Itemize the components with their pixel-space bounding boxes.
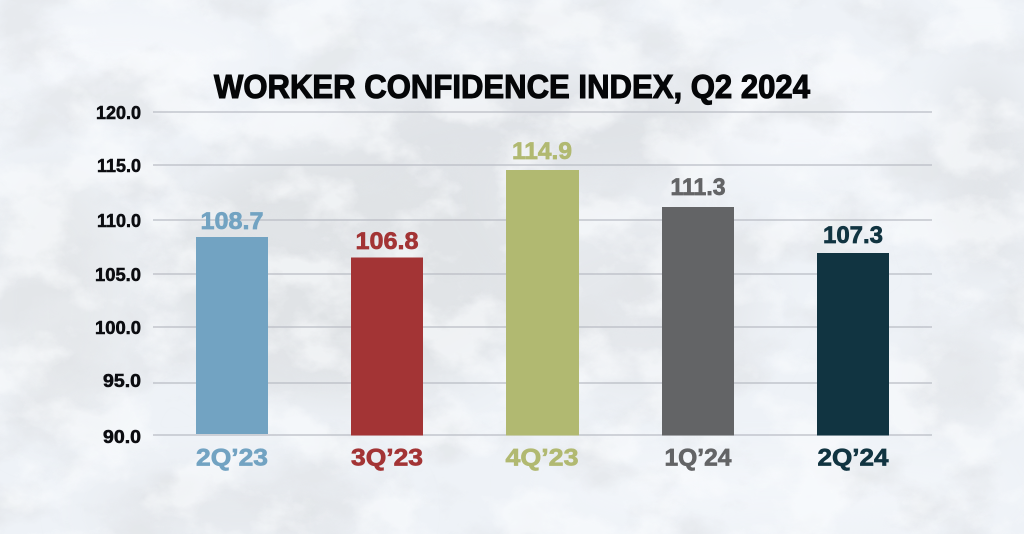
category: 2Q'24: 2Q’24 (818, 444, 889, 472)
bar group: 4Q'23 (506, 138, 579, 472)
y-axis labels: 115.0 (97, 156, 141, 176)
bar group: 3Q'23 (351, 228, 423, 472)
category: 1Q'24: 1Q’24 (664, 444, 732, 472)
y-axis labels (95, 103, 141, 447)
value: 107.3: 107.3 (823, 222, 883, 249)
title: WORKER CONFIDENCE INDEX, Q2 2024 (214, 68, 811, 105)
bar: 4Q'23 (506, 170, 579, 436)
category: 4Q'23: 4Q’23 (506, 444, 578, 472)
bar: 1Q'24 (662, 207, 734, 436)
bar: 3Q'23 (351, 258, 423, 436)
category: 2Q'23: 2Q’23 (196, 444, 268, 472)
bar group: 2Q'23 (196, 208, 268, 472)
value: 108.7: 108.7 (200, 208, 264, 235)
y-axis labels: 90.0 (103, 427, 141, 447)
bar group: 2Q'24 (817, 222, 889, 472)
gridlines (153, 112, 932, 435)
y-axis labels: 110.0 (97, 211, 141, 231)
value: 114.9: 114.9 (512, 138, 572, 165)
value: 111.3: 111.3 (670, 174, 726, 201)
value: 106.8: 106.8 (356, 228, 418, 255)
bar group: 1Q'24 (662, 174, 734, 472)
bar: 2Q'23 (196, 237, 268, 434)
y-axis labels: 105.0 (95, 265, 141, 285)
bar: 2Q'24 (817, 253, 889, 436)
y-axis labels: 120.0 (96, 103, 141, 123)
y-axis labels: 95.0 (103, 371, 141, 391)
y-axis labels: 100.0 (95, 318, 141, 338)
category: 3Q'23: 3Q’23 (351, 444, 423, 472)
